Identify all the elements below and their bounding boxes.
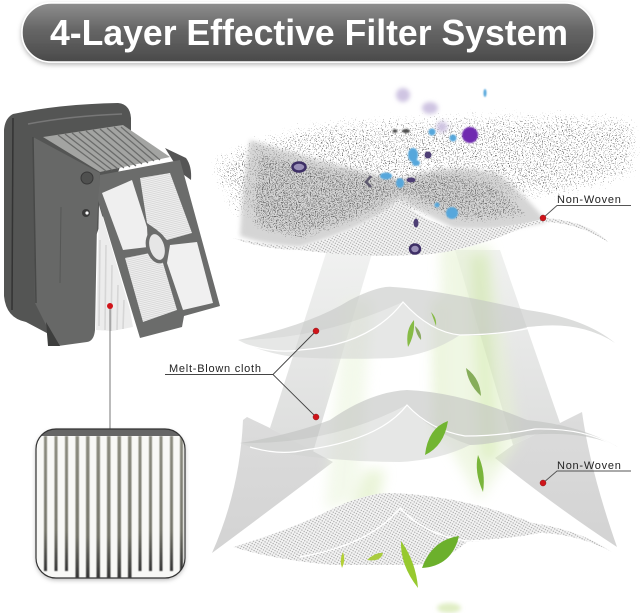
layer 1: non-woven dust layer bbox=[190, 100, 640, 256]
cloth back bbox=[240, 390, 618, 447]
leaf, large center bbox=[425, 421, 448, 455]
cover window top-left bbox=[102, 180, 148, 250]
layer 3: melt-blown cloth bbox=[240, 390, 618, 462]
purple spore bbox=[462, 127, 478, 143]
callout: non-woven top: Non-Woven bbox=[557, 194, 622, 206]
mesh sheet bbox=[233, 493, 612, 565]
dark purple particles bbox=[406, 152, 432, 228]
dust particles bbox=[292, 88, 486, 254]
cloth back bbox=[238, 287, 615, 343]
cover window bottom-right bbox=[167, 242, 213, 310]
cloth fold highlight bbox=[250, 405, 615, 452]
title text: 4-Layer Effective Filter System bbox=[50, 12, 568, 53]
leaf, mid right bbox=[466, 368, 481, 396]
leaf, bottom slim bbox=[401, 541, 418, 588]
funnel: right lower wing bbox=[495, 412, 617, 547]
cloth front bbox=[238, 302, 460, 359]
funnel: left lower wing bbox=[212, 417, 333, 553]
cloth front bbox=[240, 405, 470, 462]
layer 4: non-woven mesh bbox=[233, 493, 612, 565]
airflow funnels bbox=[212, 245, 617, 553]
top pleats bbox=[43, 125, 170, 172]
mesh underside bbox=[233, 200, 608, 256]
callout: non-woven top bbox=[540, 194, 631, 221]
leaf, bottom small center bbox=[367, 553, 383, 560]
screw hole bbox=[81, 172, 93, 184]
cover center ring bbox=[144, 230, 170, 264]
dust haze bbox=[190, 100, 640, 245]
filter product bbox=[4, 103, 220, 429]
dusty mesh underlay bbox=[240, 140, 547, 247]
layer 2: melt-blown cloth bbox=[238, 287, 615, 359]
leaf, bottom large bbox=[422, 536, 459, 568]
right rear tab bbox=[165, 148, 191, 180]
funnel: upper light beam bbox=[270, 250, 560, 452]
leaf, right slim bbox=[477, 455, 484, 492]
pale purple particles bbox=[396, 88, 448, 132]
cover window bottom-left bbox=[125, 253, 177, 322]
leader line to inset bbox=[109, 306, 111, 429]
cover window top-right bbox=[140, 173, 192, 240]
side panel bbox=[33, 137, 100, 346]
leaf, bottom small left bbox=[341, 552, 344, 568]
callout: non-woven bottom: Non-Woven bbox=[557, 460, 622, 472]
red marker bbox=[107, 303, 113, 309]
white pleats bbox=[96, 205, 133, 331]
blue particles bbox=[380, 89, 486, 219]
callout: melt-blown cloth: Melt-Blown cloth bbox=[169, 363, 262, 375]
inset: pleat close-up bbox=[36, 429, 185, 578]
chevron particle bbox=[366, 176, 371, 187]
leaf small cluster, layer 2 bbox=[407, 312, 436, 347]
callout: non-woven bottom bbox=[540, 460, 631, 486]
cloth fold highlight bbox=[244, 302, 612, 351]
back frame bbox=[4, 103, 131, 340]
callout: melt-blown cloth bbox=[165, 328, 319, 420]
dust speckle body bbox=[248, 146, 540, 245]
title banner bbox=[22, 3, 594, 62]
green light beams bbox=[325, 245, 520, 520]
cover frame bbox=[98, 160, 220, 338]
leaves bbox=[341, 312, 484, 613]
lower foot bbox=[46, 322, 60, 346]
fold highlight bbox=[300, 508, 543, 557]
dark particles bbox=[392, 129, 410, 133]
ring particles bbox=[292, 162, 420, 254]
blurred leaf, page bottom bbox=[437, 603, 461, 613]
